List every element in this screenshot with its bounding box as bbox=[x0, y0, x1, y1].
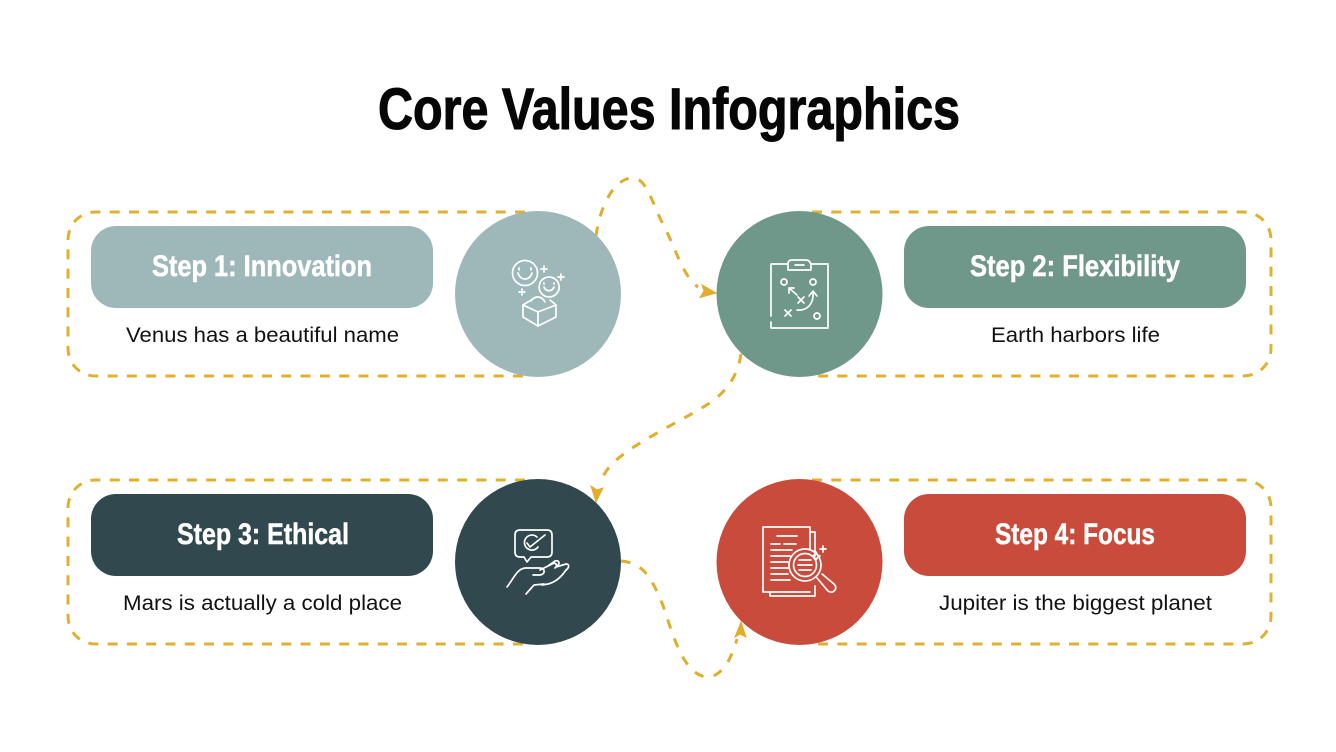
panel: step 4 focus bbox=[812, 480, 1271, 644]
panel: step 2 flexibility bbox=[812, 212, 1271, 376]
icon: clipboard with strategy play bbox=[771, 260, 828, 328]
pill: step 2 bbox=[904, 226, 1246, 308]
pill: step 3 bbox=[91, 494, 433, 576]
icon: hand holding approval speech bubble bbox=[507, 530, 569, 594]
arrow: step 1 to step 2 bbox=[596, 178, 716, 298]
dashed outline: step 4 bbox=[812, 480, 1271, 644]
arrow: step 3 to step 4 bbox=[621, 561, 746, 677]
panel: step 3 ethical bbox=[68, 480, 525, 644]
circle: step 4 bbox=[716, 479, 882, 645]
heading: step 1: Step 1: Innovation bbox=[152, 250, 372, 283]
description: step 4: Jupiter is the biggest planet bbox=[939, 591, 1212, 615]
circle: step 1 bbox=[455, 211, 621, 377]
pill: step 1 bbox=[91, 226, 433, 308]
description: step 1: Venus has a beautiful name bbox=[126, 323, 399, 347]
arrow: step 2 to step 3 bbox=[591, 354, 741, 502]
circle: step 3 bbox=[455, 479, 621, 645]
pill: step 4 bbox=[904, 494, 1246, 576]
title: Core Values Infographics bbox=[378, 77, 960, 142]
dashed outline: step 3 bbox=[68, 480, 525, 644]
description: step 3: Mars is actually a cold place bbox=[123, 591, 402, 615]
panel: step 1 innovation bbox=[68, 212, 525, 376]
heading: step 3: Step 3: Ethical bbox=[177, 518, 349, 551]
description: step 2: Earth harbors life bbox=[991, 323, 1160, 347]
circle: step 2 bbox=[716, 211, 882, 377]
dashed outline: step 2 bbox=[812, 212, 1271, 376]
dashed outline: step 1 bbox=[68, 212, 525, 376]
heading: step 4: Step 4: Focus bbox=[995, 518, 1155, 551]
icon: documents under a magnifying glass bbox=[763, 527, 836, 596]
heading: step 2: Step 2: Flexibility bbox=[970, 250, 1180, 283]
icon: smiling faces rising from a box bbox=[512, 260, 564, 326]
